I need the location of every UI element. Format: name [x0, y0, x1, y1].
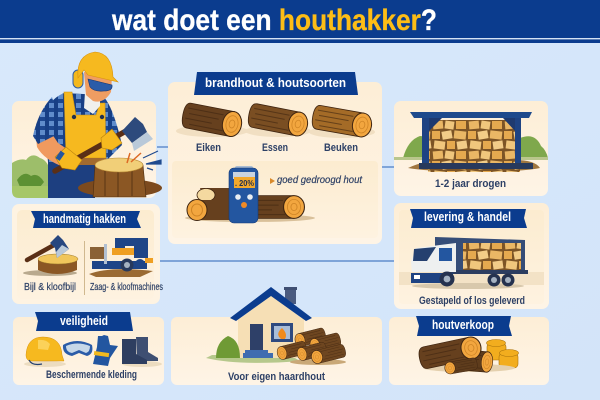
moisture meter	[229, 166, 258, 223]
log: Essen	[245, 103, 311, 154]
panel: levering en handel	[394, 203, 549, 309]
icon: helm	[24, 337, 66, 367]
banner: handmatig: handmatig hakken	[43, 211, 126, 226]
label: bijl: Bijl & kloofbijl	[24, 281, 76, 293]
banner: handmatig	[31, 211, 141, 228]
panel: veiligheid	[13, 312, 164, 385]
panel: houtverkoop	[389, 316, 549, 385]
inset: vochtmeter	[172, 161, 378, 238]
log stack	[276, 327, 347, 365]
title: wat doet een houthakker?	[111, 4, 437, 37]
logs under meter	[185, 188, 315, 222]
bushes and grass	[12, 155, 60, 198]
label: voor eigen haardhout: Voor eigen haardhout	[228, 371, 325, 383]
panel: drogen	[394, 101, 548, 196]
header band	[0, 0, 600, 43]
banner: houtverkoop: houtverkoop	[432, 317, 494, 332]
moisture meter: . 20%	[235, 179, 254, 188]
log: Essen: Essen	[262, 142, 288, 154]
log: Beuken: Beuken	[324, 142, 358, 154]
truck	[411, 237, 528, 289]
logs	[417, 335, 515, 375]
panel: brandhout en houtsoorten	[168, 72, 382, 244]
bushes	[394, 136, 548, 160]
banner: levering	[410, 209, 527, 228]
connector lines	[156, 147, 402, 261]
log: Eiken	[176, 102, 248, 154]
impact marks	[143, 151, 161, 170]
earmuff	[73, 70, 83, 88]
banner: levering: levering & handel	[424, 209, 511, 224]
icon: kloofmachine	[89, 238, 153, 277]
helmet	[78, 52, 118, 82]
neck and head	[84, 92, 100, 114]
label: machines: Zaag- & kloofmachines	[90, 281, 163, 293]
label: goed gedroogd hout: goed gedroogd hout	[277, 174, 363, 186]
banner: veiligheid: veiligheid	[60, 313, 108, 328]
icon: laarzen	[122, 337, 162, 367]
panel: houthakker	[12, 52, 162, 198]
worker legs	[48, 160, 95, 198]
worker torso	[34, 93, 122, 162]
log: Beuken	[309, 104, 375, 154]
banner: houtverkoop	[416, 316, 512, 336]
panel: eigen haardhout	[171, 287, 382, 385]
icon: handschoen	[93, 335, 118, 366]
divider	[84, 241, 85, 295]
label: 1-2 jaar drogen: 1-2 jaar drogen	[435, 178, 506, 190]
label: gestapeld: Gestapeld of los geleverd	[419, 295, 525, 307]
house	[206, 287, 312, 363]
log: Eiken: Eiken	[196, 142, 221, 154]
axe handle	[55, 131, 126, 171]
icon: bijl op blok	[23, 235, 78, 276]
coins	[486, 340, 518, 368]
banner: veiligheid	[35, 312, 133, 331]
label: beschermende kleding: Beschermende kleding	[46, 369, 137, 381]
overalls	[64, 92, 106, 158]
axe head	[122, 117, 153, 151]
panel: handmatig hakken	[12, 204, 163, 304]
gloves	[55, 129, 122, 170]
left arm	[36, 132, 73, 168]
safety glasses	[88, 79, 112, 91]
ground	[408, 160, 540, 171]
tree stump	[78, 153, 162, 197]
banner: brandhout: brandhout & houtsoorten	[205, 75, 346, 90]
banner: brandhout	[194, 72, 358, 95]
icon: veiligheidsbril	[63, 341, 92, 356]
woodshed	[410, 112, 533, 172]
